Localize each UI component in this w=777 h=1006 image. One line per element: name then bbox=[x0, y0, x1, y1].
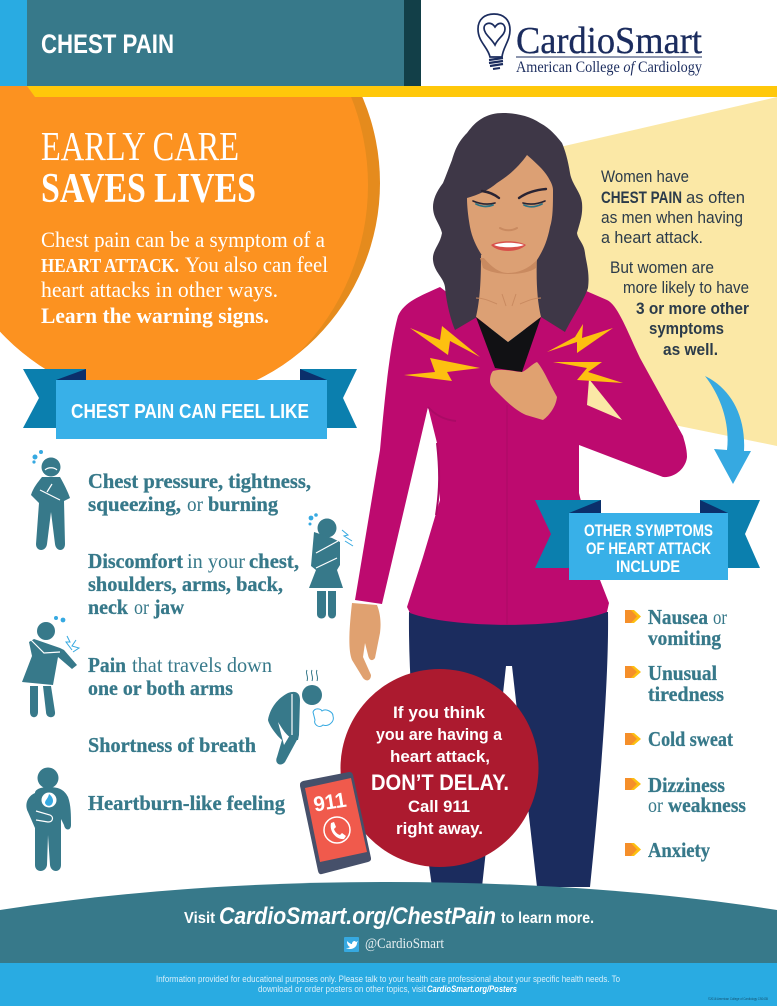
item: discomfort: chest, bbox=[249, 549, 299, 573]
icon: twitter bbox=[344, 937, 359, 952]
title: early care saves lives: SAVES LIVES bbox=[41, 166, 256, 212]
banner: other symptoms: OTHER SYMPTOMS bbox=[584, 521, 713, 540]
callout: don't delay circle: Call 911 bbox=[408, 797, 470, 816]
callout: women text: as men when having bbox=[601, 209, 743, 227]
callout: don't delay circle bbox=[340, 669, 538, 867]
banner: chest pain can feel like bbox=[23, 369, 357, 439]
icon: phone 911: 911 bbox=[312, 789, 348, 817]
item: discomfort: or bbox=[134, 595, 149, 619]
item: discomfort: jaw bbox=[153, 595, 185, 619]
item: nausea bbox=[625, 605, 727, 650]
callout: women text: Women have bbox=[601, 168, 689, 186]
logo: CardioSmart bbox=[478, 14, 702, 76]
heading: chest pain: CHEST PAIN bbox=[41, 29, 174, 59]
item: discomfort: neck bbox=[88, 595, 128, 619]
footer: visit line: CardioSmart.org/ChestPain bbox=[219, 903, 496, 930]
callout: women text: CHEST PAIN bbox=[601, 189, 682, 207]
item: shortness of breath: Shortness of breath bbox=[88, 733, 256, 757]
item: dizziness bbox=[625, 773, 746, 817]
arrow: blue curved bbox=[705, 376, 751, 484]
pants bbox=[409, 612, 608, 887]
footer: disclaimer band: CardioSmart.org/Posters bbox=[427, 984, 517, 994]
item: tiredness: Unusual bbox=[648, 661, 717, 685]
callout: don't delay circle: DON’T DELAY. bbox=[371, 770, 509, 795]
intro text block: HEART ATTACK. bbox=[41, 255, 179, 277]
item: cold sweat bbox=[625, 727, 733, 751]
hand on chest bbox=[490, 362, 557, 420]
banner: chest pain can feel like: CHEST PAIN CAN FEEL LIKE bbox=[71, 401, 309, 423]
item: tiredness bbox=[625, 661, 724, 706]
item: heartburn: Heartburn-like feeling bbox=[88, 791, 285, 815]
footer: disclaimer band: download or order posters on other topics, visit bbox=[258, 984, 426, 994]
item: dizziness: weakness bbox=[668, 793, 746, 817]
item: discomfort: shoulders, arms, back, bbox=[88, 572, 283, 596]
item: discomfort bbox=[88, 549, 299, 619]
gap between arm and torso bbox=[587, 379, 622, 420]
footer: teal arc bbox=[0, 882, 777, 963]
neck bbox=[476, 255, 541, 342]
intro text block: Chest pain can be a symptom of a bbox=[41, 227, 325, 252]
callout: women text: more likely to have bbox=[623, 279, 749, 297]
item: anxiety: Anxiety bbox=[648, 838, 710, 862]
callout: women text: a heart attack. bbox=[601, 229, 703, 247]
black top bbox=[476, 317, 541, 372]
intro text block bbox=[41, 227, 328, 328]
yellow stripe bbox=[27, 86, 777, 97]
item: dizziness: Dizziness bbox=[648, 773, 725, 797]
item: pain travels: one or both arms bbox=[88, 676, 233, 700]
item: nausea: or bbox=[713, 605, 727, 629]
footer: disclaimer band bbox=[0, 963, 777, 1006]
item: tiredness: tiredness bbox=[648, 682, 724, 706]
banner: other symptoms bbox=[535, 500, 760, 580]
logo: CardioSmart: CardioSmart bbox=[516, 20, 702, 62]
callout: women text: 3 or more other bbox=[636, 300, 750, 318]
title: early care saves lives bbox=[41, 123, 256, 212]
callout: don't delay circle: right away. bbox=[396, 819, 483, 838]
item: chest pressure bbox=[88, 469, 311, 516]
intro text block: Learn the warning signs. bbox=[41, 303, 269, 328]
list: chest pain symptoms bbox=[88, 469, 311, 815]
footer: disclaimer band: Information provided for educational purposes only. Please talk to your health care professional about your specific health needs. To bbox=[156, 974, 620, 984]
icon: lightbulb with heart bbox=[478, 14, 510, 69]
intro text block: You also can feel bbox=[185, 252, 328, 277]
callout: women text: symptoms bbox=[649, 320, 724, 338]
twitter handle: @CardioSmart bbox=[365, 936, 445, 952]
item: dizziness: or bbox=[648, 793, 663, 817]
hand: left bbox=[349, 603, 381, 680]
facial features bbox=[473, 189, 546, 230]
callout: women text: as often bbox=[686, 189, 745, 207]
icon: woman holding shoulder bbox=[308, 513, 353, 618]
callout: don't delay circle: heart attack, bbox=[390, 747, 490, 766]
header bar bbox=[0, 0, 421, 86]
panel: orange circle intro bbox=[0, 86, 380, 380]
icon: person with heartburn bbox=[26, 768, 71, 871]
icon: bent person short of breath bbox=[268, 670, 333, 764]
item: discomfort: in your bbox=[187, 549, 245, 573]
title: early care saves lives: EARLY CARE bbox=[41, 123, 239, 169]
item: anxiety bbox=[625, 838, 710, 862]
callout: women text bbox=[601, 168, 750, 359]
item: chest pressure: Chest pressure, tightness, bbox=[88, 469, 311, 493]
callout: don't delay circle: you are having a bbox=[376, 725, 502, 744]
item: nausea: Nausea bbox=[648, 605, 708, 629]
panel: yellow callout background bbox=[560, 97, 777, 446]
callout: don't delay circle: If you think bbox=[393, 703, 486, 722]
jacket bbox=[355, 287, 687, 625]
callout: women text: as well. bbox=[663, 341, 718, 359]
banner: other symptoms: INCLUDE bbox=[616, 557, 680, 576]
item: pain travels: that travels down bbox=[132, 653, 272, 677]
face bbox=[467, 155, 553, 273]
icon: person clutching chest bbox=[31, 450, 70, 550]
list: other symptoms bbox=[625, 605, 746, 862]
item: pain travels bbox=[88, 653, 272, 700]
callout: women text: But women are bbox=[610, 259, 714, 277]
hair bbox=[433, 113, 589, 332]
footer: visit line: to learn more. bbox=[501, 910, 594, 927]
banner: other symptoms: OF HEART ATTACK bbox=[586, 539, 712, 558]
intro text block: heart attacks in other ways. bbox=[41, 277, 278, 302]
illustration: woman with chest pain bbox=[349, 113, 687, 887]
item: cold sweat: Cold sweat bbox=[648, 727, 733, 751]
item: pain travels: Pain bbox=[88, 653, 126, 677]
item: chest pressure: or bbox=[187, 492, 203, 516]
item: nausea: vomiting bbox=[648, 626, 721, 650]
item: discomfort: Discomfort bbox=[88, 549, 183, 573]
icon: woman with arm pain bbox=[22, 616, 79, 717]
icon: phone 911 bbox=[300, 772, 371, 874]
footer: visit line: Visit bbox=[184, 910, 216, 927]
item: chest pressure: squeezing, bbox=[88, 492, 181, 516]
icon: pain bolts bbox=[404, 324, 623, 383]
item: chest pressure: burning bbox=[208, 492, 278, 516]
logo: CardioSmart: American College of Cardiology bbox=[516, 59, 702, 76]
